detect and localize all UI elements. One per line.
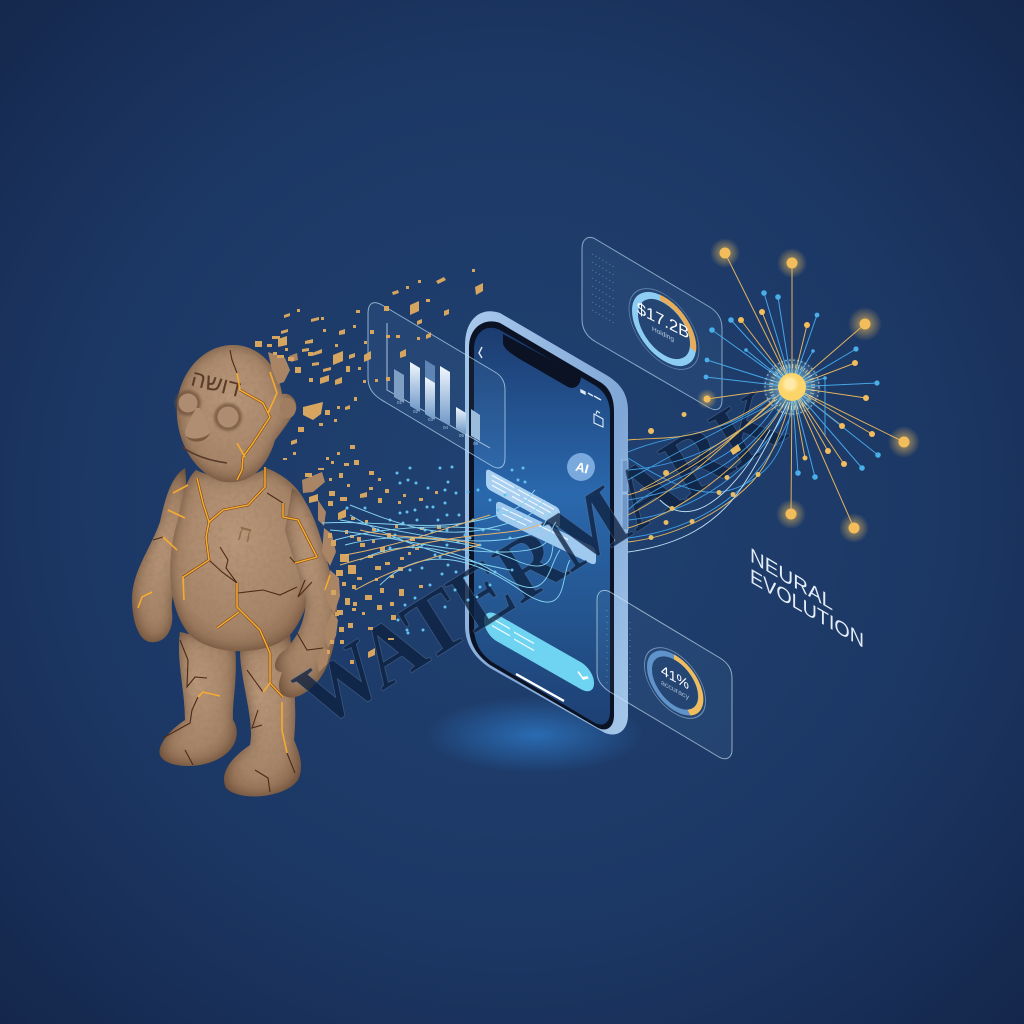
data flow lines from core [628, 392, 796, 552]
action button [484, 607, 594, 697]
blue particles [347, 467, 525, 633]
forehead inscription: דושה [188, 365, 244, 402]
axis labels: 04 [443, 425, 449, 430]
panel frame [582, 237, 722, 410]
face features [175, 390, 296, 463]
data flow lines into phone [322, 490, 570, 602]
donut ring [629, 274, 699, 384]
dissolving clay edge [268, 352, 340, 672]
home indicator [516, 674, 564, 701]
screen corner icon [594, 411, 603, 427]
glowing cracks [138, 372, 330, 753]
panel frame [597, 590, 732, 759]
particles from the figure [255, 269, 525, 664]
gold particles [255, 269, 483, 664]
AI badge: AI [574, 459, 590, 477]
blue nodes [704, 290, 881, 480]
neural burst [697, 238, 920, 543]
axis labels: 06 [473, 441, 479, 446]
dotted grid [592, 254, 616, 324]
clay figure [132, 345, 340, 796]
phone bezel [469, 321, 614, 729]
blue connections [706, 293, 878, 477]
figure body parts [132, 345, 337, 796]
dark cracks [153, 350, 323, 792]
glass panel: accuracy ring [597, 590, 732, 759]
axis labels: 03 [428, 417, 434, 422]
ring value: 41% [661, 662, 689, 693]
ring value: Holding [652, 326, 674, 343]
phone screen [474, 328, 610, 725]
glass panel: revenue ring [582, 237, 722, 410]
smartphone [465, 311, 628, 734]
outer node glows [697, 238, 920, 543]
axis labels [397, 400, 479, 446]
tick column [607, 610, 630, 696]
donut ring [644, 635, 706, 731]
axis labels: 05 [459, 433, 465, 438]
gold connections [707, 253, 904, 528]
glowing core [762, 357, 822, 417]
chart axes [387, 323, 490, 448]
side buttons [622, 460, 628, 530]
title: neural evolution: NEURAL [750, 543, 833, 615]
glass panel: bar chart [368, 303, 505, 468]
notch [503, 334, 581, 388]
chat bubble two [496, 500, 596, 566]
bars [394, 360, 480, 441]
gold nodes [704, 248, 910, 534]
floor glow under phone [425, 697, 645, 773]
axis labels: 02 [413, 409, 419, 414]
AI badge [567, 453, 595, 481]
phone frame [465, 311, 628, 734]
back chevron [479, 347, 482, 358]
ring value: $17.2B [637, 298, 689, 343]
axis labels: 01 [397, 400, 403, 405]
chest glyph: ח [235, 520, 255, 549]
panel frame [368, 303, 505, 468]
watermark: WATERMARK [279, 371, 801, 747]
title: neural evolution: EVOLUTION [750, 563, 864, 653]
ring value: accuracy [661, 678, 689, 702]
status bar [581, 390, 601, 400]
crack shadows [183, 390, 317, 697]
chat bubble one [486, 468, 560, 529]
